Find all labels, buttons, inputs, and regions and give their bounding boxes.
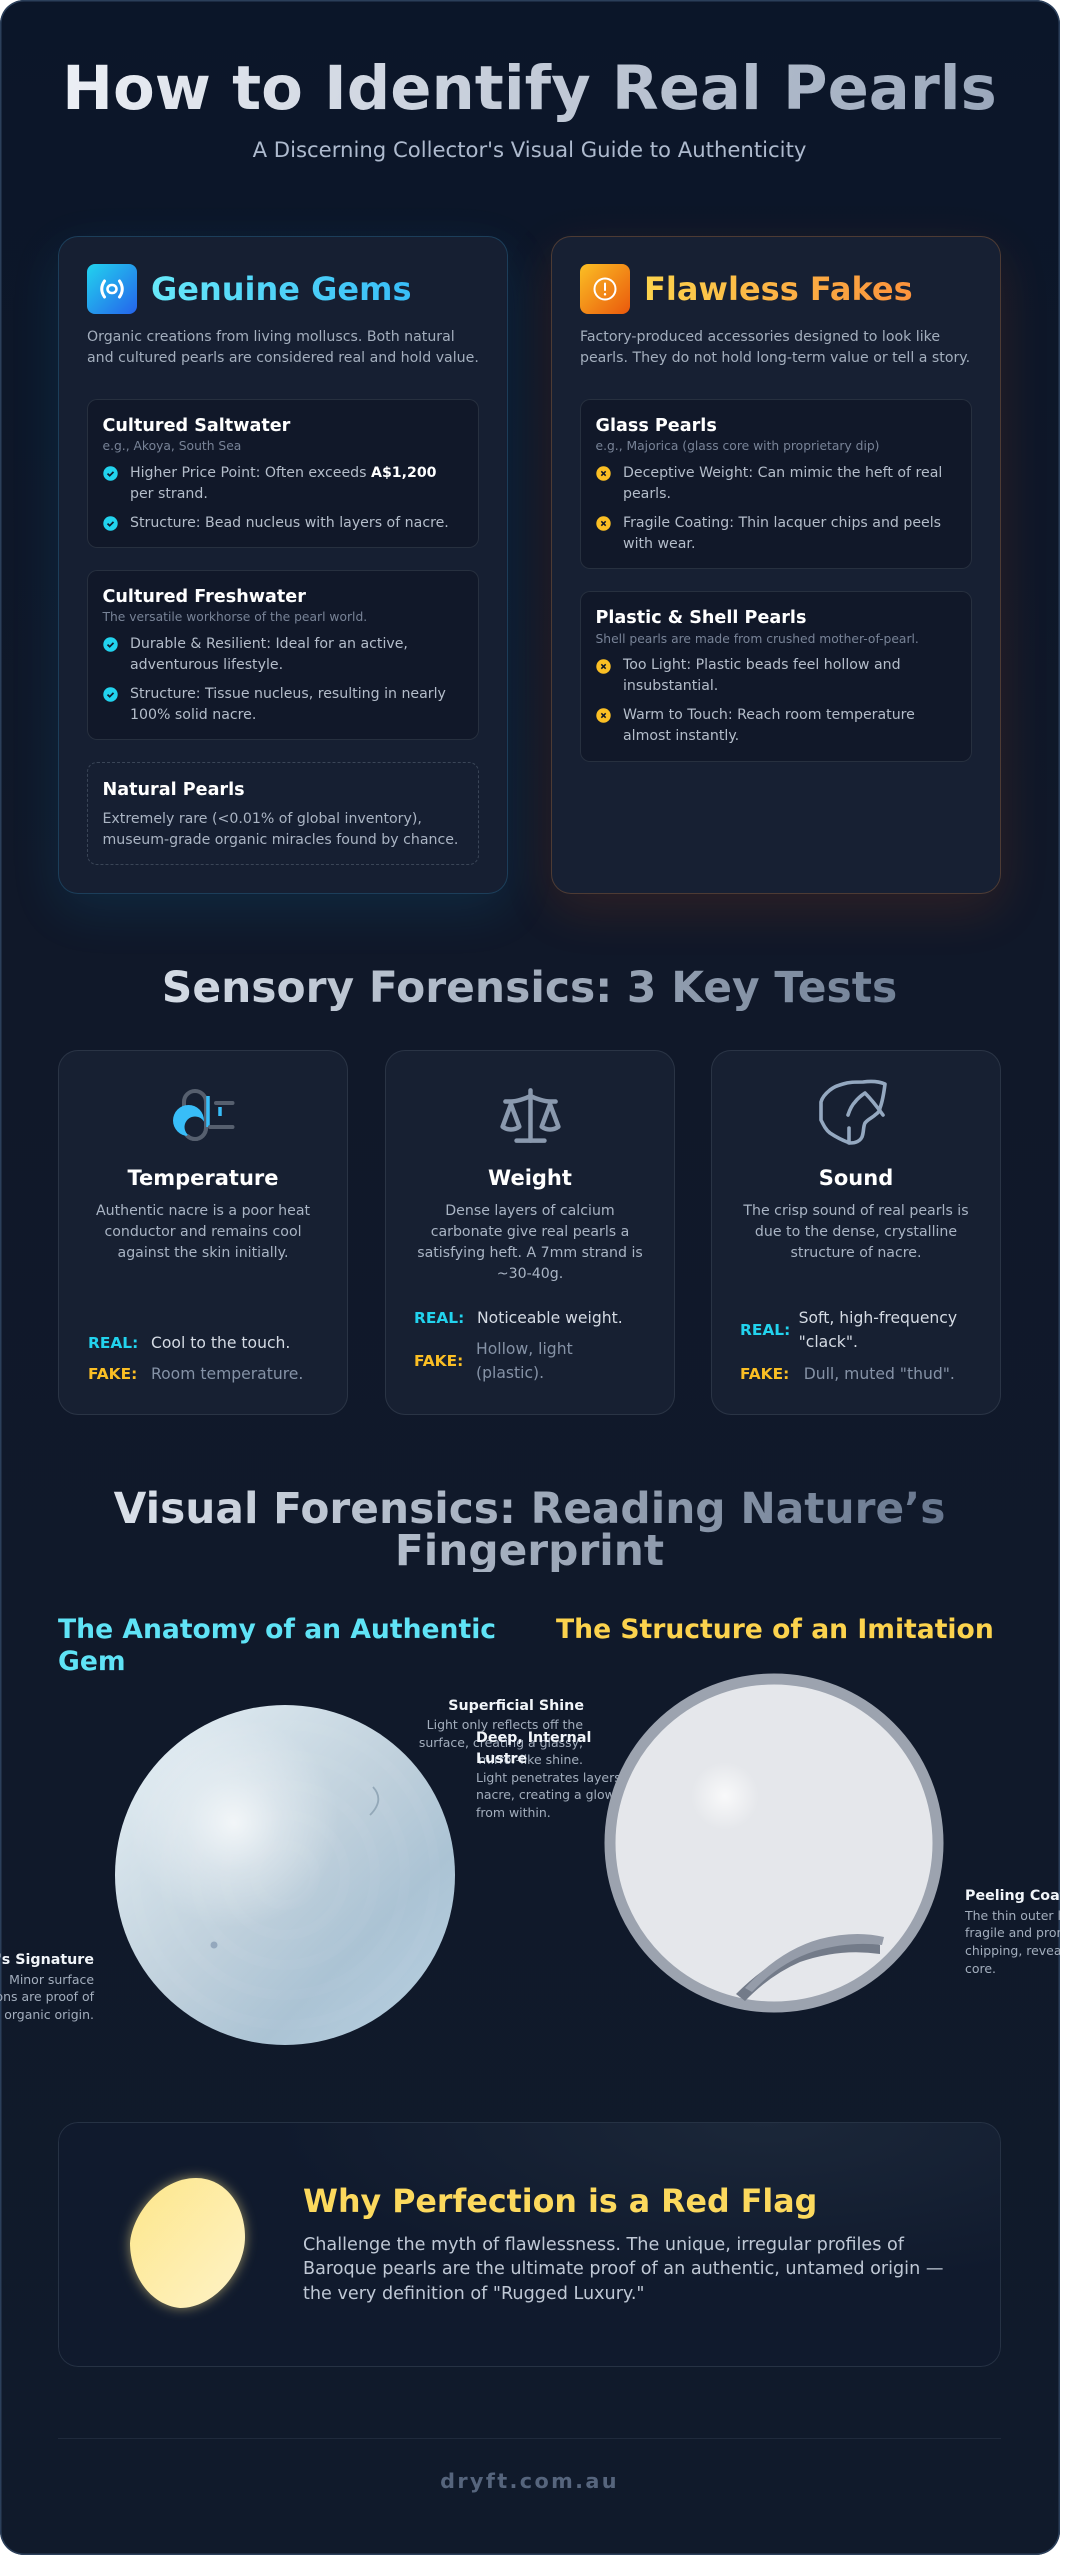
illustration: imitation pearl (604, 1674, 944, 2012)
illustration: authentic pearl (115, 1705, 455, 2045)
subheading: anatomy: Gem (58, 1646, 126, 1676)
illustration: baroque pearl (122, 2170, 254, 2316)
callout body: organic origin. (4, 2007, 94, 2022)
heading: flawless fakes: Flawless Fakes (644, 270, 913, 308)
sound description: structure of nacre. (791, 1245, 921, 1261)
panel: flawless fakes (551, 236, 1001, 894)
real row (740, 1308, 957, 1351)
callout body: core. (965, 1961, 996, 1976)
description: genuine gems: and cultured pearls are considered real and hold value. (87, 350, 479, 366)
real row: "clack". (799, 1333, 858, 1351)
real row: REAL: (88, 1334, 138, 1352)
callout body: Minor surface (9, 1972, 94, 1986)
sound description: due to the dense, crystalline (755, 1224, 957, 1240)
sound description (743, 1202, 969, 1261)
real row (88, 1334, 290, 1352)
fake row (414, 1340, 573, 1382)
callout body (476, 1770, 637, 1820)
heading: genuine gems: Genuine Gems (151, 270, 411, 308)
item: tissue nucleus: 100% solid nacre. (130, 707, 256, 723)
temperature description: Authentic nacre is a poor heat (96, 1202, 310, 1218)
sub-card: natural pearls (87, 762, 479, 865)
item: durable (103, 636, 408, 673)
weight description: ~30-40g. (497, 1266, 563, 1282)
callout body: Light penetrates layers of (476, 1770, 637, 1784)
heading: sensory forensics: Sensory Forensics: 3 Key Tests (162, 962, 897, 1012)
callout text: the very definition of "Rugged Luxury." (303, 2284, 645, 2304)
item: warm to touch: almost instantly. (623, 728, 739, 744)
description: genuine gems: Organic creations from living molluscs. Both natural (87, 329, 455, 345)
item: durable: adventurous lifestyle. (130, 657, 283, 673)
callout text: Challenge the myth of flawlessness. The unique, irregular profiles of (303, 2235, 904, 2255)
sub-card: cultured freshwater (87, 570, 479, 740)
saltwater note: e.g., Akoya, South Sea (102, 439, 241, 453)
real row (414, 1308, 623, 1326)
item: durable: Durable & Resilient: Ideal for an active, (130, 636, 408, 652)
fake row: Room temperature. (151, 1365, 303, 1383)
fake row: FAKE: (740, 1365, 789, 1383)
callout: signature (0, 1952, 94, 2022)
plastic note: Shell pearls are made from crushed mother-of-pearl. (596, 632, 919, 646)
weight title: Weight (488, 1166, 572, 1190)
sound title: Sound (819, 1166, 893, 1190)
subheading: anatomy (58, 1614, 496, 1676)
saltwater title: Cultured Saltwater (102, 416, 290, 436)
callout body: Light only reflects off the (427, 1717, 583, 1732)
panel: sound test (711, 1050, 1001, 1415)
heading: visual forensics: Fingerprint (395, 1526, 664, 1574)
item: tissue nucleus: Structure: Tissue nucleus, resulting in nearly (130, 686, 446, 702)
callout body (964, 1908, 1060, 1976)
real row: REAL: (740, 1321, 790, 1339)
freshwater note: The versatile workhorse of the pearl world. (102, 610, 367, 624)
fake row: Hollow, light (476, 1340, 573, 1358)
description: flawless fakes: Factory-produced accessories designed to look like (580, 329, 940, 345)
natural title: Natural Pearls (102, 780, 245, 800)
temperature description: against the skin initially. (118, 1245, 288, 1261)
icon: genuine pearl signal (87, 264, 137, 314)
glass title: Glass Pearls (596, 416, 717, 436)
item: deceptive weight: pearls. (623, 486, 671, 502)
item: tissue nucleus (103, 686, 446, 723)
callout body: nacre, creating a glow (476, 1787, 615, 1802)
item: fragile coating: Fragile Coating: Thin lacquer chips and peels (623, 515, 941, 531)
item: deceptive weight: Deceptive Weight: Can mimic the heft of real (623, 465, 942, 481)
heading: visual forensics: Visual Forensics: Reading Nature’s (114, 1484, 945, 1532)
item: price point: Higher Price Point: Often exceeds A$1,200 (130, 465, 437, 481)
callout: peeling coating (964, 1888, 1060, 1976)
real row: Noticeable weight. (477, 1308, 623, 1326)
description: flawless fakes: pearls. They do not hold long-term value or tell a story. (580, 350, 970, 366)
callout text (303, 2235, 943, 2304)
sub-card: plastic and shell pearls (580, 591, 972, 762)
item: price point: per strand. (130, 486, 208, 502)
item: deceptive weight (596, 465, 942, 502)
callout body (0, 1972, 94, 2022)
item: warm to touch: Warm to Touch: Reach room temperature (623, 706, 915, 722)
fake row: FAKE: (414, 1352, 463, 1370)
callout title: Deep, Internal (476, 1730, 591, 1746)
icon: warning (580, 264, 630, 314)
temperature description (96, 1202, 310, 1261)
subheading: anatomy: The Anatomy of an Authentic (58, 1614, 496, 1644)
fake row: Dull, muted "thud". (804, 1365, 955, 1383)
plastic title: Plastic & Shell Pearls (596, 608, 806, 628)
temperature title: Temperature (127, 1166, 279, 1190)
real row: Cool to the touch. (151, 1334, 290, 1352)
panel: weight test (385, 1050, 675, 1415)
callout body: from within. (476, 1805, 551, 1820)
panel: genuine gems (58, 236, 508, 894)
item: warm to touch (596, 706, 915, 744)
subheading: imitation: The Structure of an Imitation (556, 1614, 994, 1644)
callout text: Baroque pearls are the ultimate proof of an authentic, untamed origin — (303, 2259, 943, 2279)
natural description: Extremely rare (<0.01% of global inventory), (102, 811, 422, 827)
fake row: (plastic). (476, 1364, 544, 1382)
description: genuine gems (87, 329, 479, 366)
sub-card: cultured saltwater (87, 399, 479, 548)
weight description: satisfying heft. A 7mm strand is (417, 1245, 643, 1261)
item: price point (103, 465, 437, 502)
title: How to Identify Real Pearls (62, 54, 997, 124)
real row: Soft, high-frequency (799, 1308, 957, 1326)
weight description: Dense layers of calcium (445, 1202, 615, 1218)
heading: visual forensics (58, 1488, 1001, 1572)
icon: temperature (173, 1089, 234, 1141)
callout body: surface, creating a glassy, (419, 1735, 583, 1750)
callout title: Superficial Shine (448, 1698, 584, 1714)
callout title (476, 1730, 591, 1767)
footer brand: dryft.com.au (440, 2469, 619, 2493)
subtitle: A Discerning Collector's Visual Guide to Authenticity (253, 137, 806, 162)
callout: deep internal lustre (476, 1730, 637, 1820)
fake row: FAKE: (88, 1365, 137, 1383)
item: too light: Too Light: Plastic beads feel hollow and (623, 657, 901, 673)
icon: scales (500, 1088, 561, 1143)
natural description (102, 811, 458, 848)
callout panel: perfection red flag (58, 2122, 1001, 2367)
weight description (417, 1202, 643, 1282)
sound description: The crisp sound of real pearls is (743, 1202, 969, 1218)
item: structure: Structure: Bead nucleus with layers of nacre. (130, 515, 449, 531)
glass note: e.g., Majorica (glass core with proprietary dip) (596, 439, 879, 453)
callout body: mirror-like shine. (478, 1752, 583, 1767)
item: fragile coating (596, 515, 941, 552)
temperature description: conductor and remains cool (104, 1224, 302, 1240)
icon: sound (819, 1080, 887, 1145)
callout title: Lustre (476, 1751, 527, 1767)
freshwater title: Cultured Freshwater (102, 587, 306, 607)
description: flawless fakes (580, 329, 970, 366)
callout: superficial shine (419, 1698, 584, 1767)
item: too light (596, 657, 901, 694)
real row: REAL: (414, 1308, 464, 1326)
sub-card: glass pearls (580, 399, 972, 569)
item: fragile coating: with wear. (623, 536, 695, 552)
panel: temperature test (58, 1050, 348, 1415)
natural description: museum-grade organic miracles found by chance. (102, 832, 458, 848)
weight description: carbonate give real pearls a (431, 1224, 629, 1240)
item: too light: insubstantial. (623, 678, 718, 694)
callout body (419, 1717, 583, 1767)
callout heading: Why Perfection is a Red Flag (303, 2184, 817, 2220)
